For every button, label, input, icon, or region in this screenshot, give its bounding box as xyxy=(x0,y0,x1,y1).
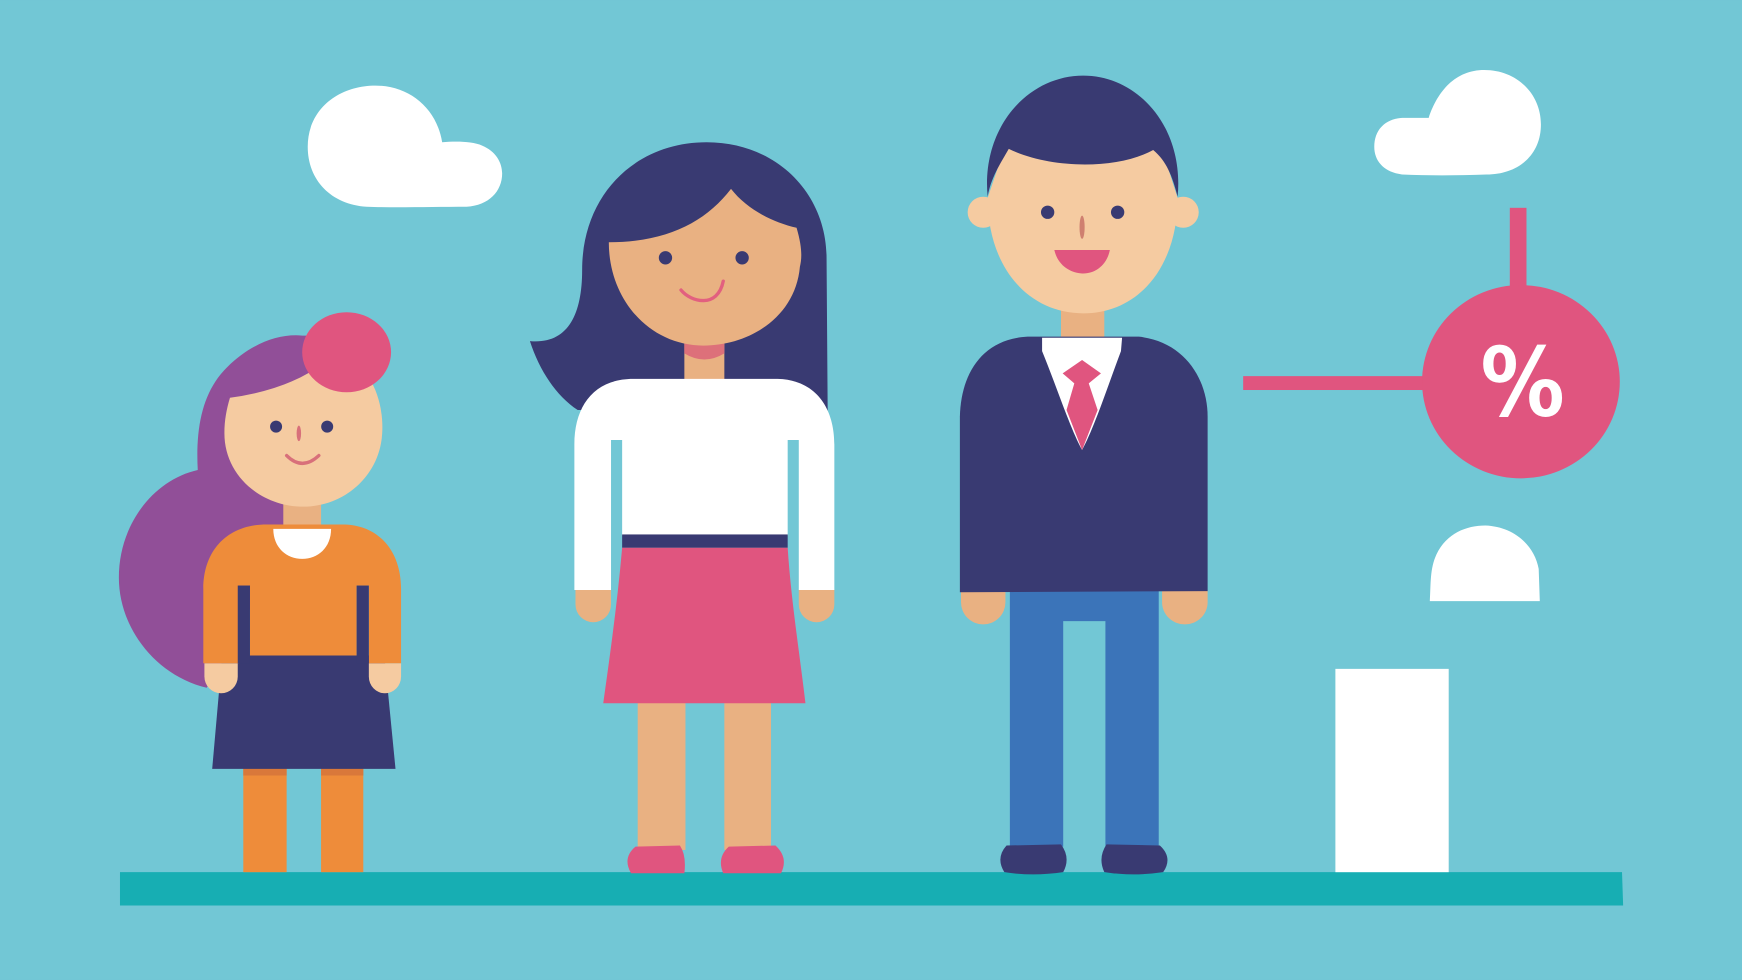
woman waist band xyxy=(622,534,788,548)
horizontal connector xyxy=(1243,376,1432,390)
man suit jacket xyxy=(960,337,1208,592)
man legs xyxy=(1010,589,1159,847)
man tie xyxy=(1063,360,1101,450)
woman shoes xyxy=(627,846,784,873)
woman collar shadow xyxy=(684,343,724,359)
vertical connector xyxy=(1510,208,1526,291)
man shirt xyxy=(1042,338,1122,450)
man mouth xyxy=(1054,250,1110,273)
girl face xyxy=(224,372,382,507)
girl eyes xyxy=(270,421,333,433)
man eyes xyxy=(1041,206,1124,219)
girl skirt xyxy=(212,656,396,769)
woman neck xyxy=(684,333,724,383)
cloud: top right xyxy=(1374,70,1541,175)
white bar xyxy=(1335,669,1449,872)
white dome shape xyxy=(1430,526,1540,601)
man ears xyxy=(968,197,1199,228)
woman eyes xyxy=(659,251,749,264)
girl mouth xyxy=(287,456,319,463)
girl nose xyxy=(297,426,301,441)
man face xyxy=(988,122,1178,313)
woman legs xyxy=(638,700,771,850)
girl sweater xyxy=(203,524,401,663)
girl legs xyxy=(243,767,363,872)
girl overall straps xyxy=(238,586,369,663)
man hair xyxy=(987,76,1178,197)
man neck xyxy=(1061,300,1104,344)
girl hair xyxy=(119,335,333,688)
woman skirt xyxy=(603,548,805,703)
percent circle xyxy=(1422,285,1620,478)
woman mouth xyxy=(681,281,723,301)
percent sign: % xyxy=(1480,327,1565,439)
cloud: top left xyxy=(308,86,502,207)
girl hands xyxy=(204,663,401,693)
figure: girl xyxy=(119,312,401,872)
ground bar xyxy=(120,872,1623,906)
man nose xyxy=(1080,216,1085,239)
girl hair bun xyxy=(302,312,391,392)
man hands xyxy=(961,590,1208,624)
percent pin callout xyxy=(1243,208,1620,478)
woman back hair xyxy=(530,142,828,411)
woman hands xyxy=(575,589,834,622)
girl neck xyxy=(283,500,321,533)
girl collar xyxy=(273,529,331,559)
man shoes xyxy=(1000,844,1167,874)
figure: man xyxy=(960,76,1208,874)
woman blouse xyxy=(574,379,834,590)
figure: woman xyxy=(530,142,834,873)
woman face xyxy=(609,189,801,346)
